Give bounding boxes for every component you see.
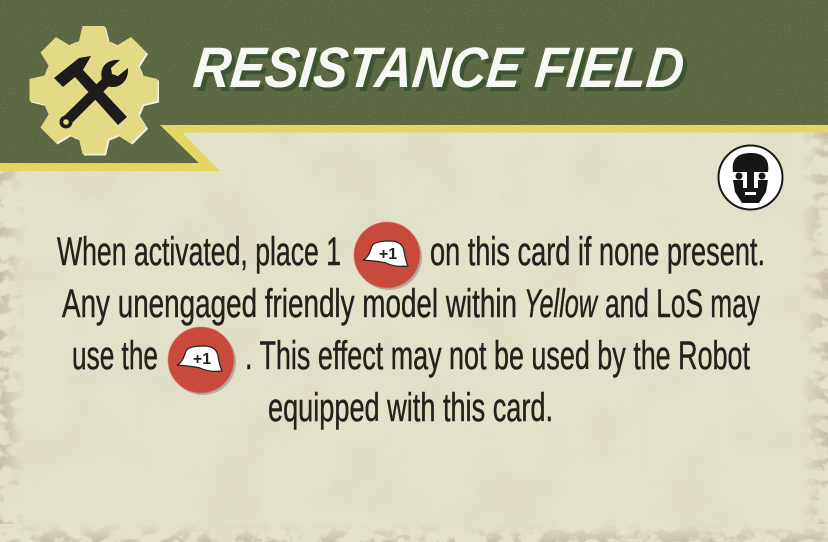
rules text: When activated, place 1 [57,230,341,274]
yellow banner trim [0,125,828,171]
rules text [57,230,765,430]
token: helmet +1, line 3 [168,327,236,395]
robot faction icon [718,146,782,210]
token: helmet +1, line 1 [354,222,422,290]
title: RESISTANCE FIELD [191,36,687,100]
rules text: equipped with this card. [268,386,553,430]
token: helmet +1, line 3: +1 [193,351,211,368]
token: helmet +1, line 1: +1 [379,246,397,263]
title: RESISTANCE FIELD [195,40,691,104]
gear body [30,26,158,154]
rules text: use the [72,334,158,378]
gear white shadow [31,28,159,156]
wrench [60,60,128,128]
rules text: Yellow [524,282,599,326]
rules text: Any unengaged friendly model within [62,282,517,326]
paper background [0,132,828,542]
gear icon with hammer and wrench [30,26,159,156]
green header banner [0,0,828,170]
hammer [54,56,127,125]
